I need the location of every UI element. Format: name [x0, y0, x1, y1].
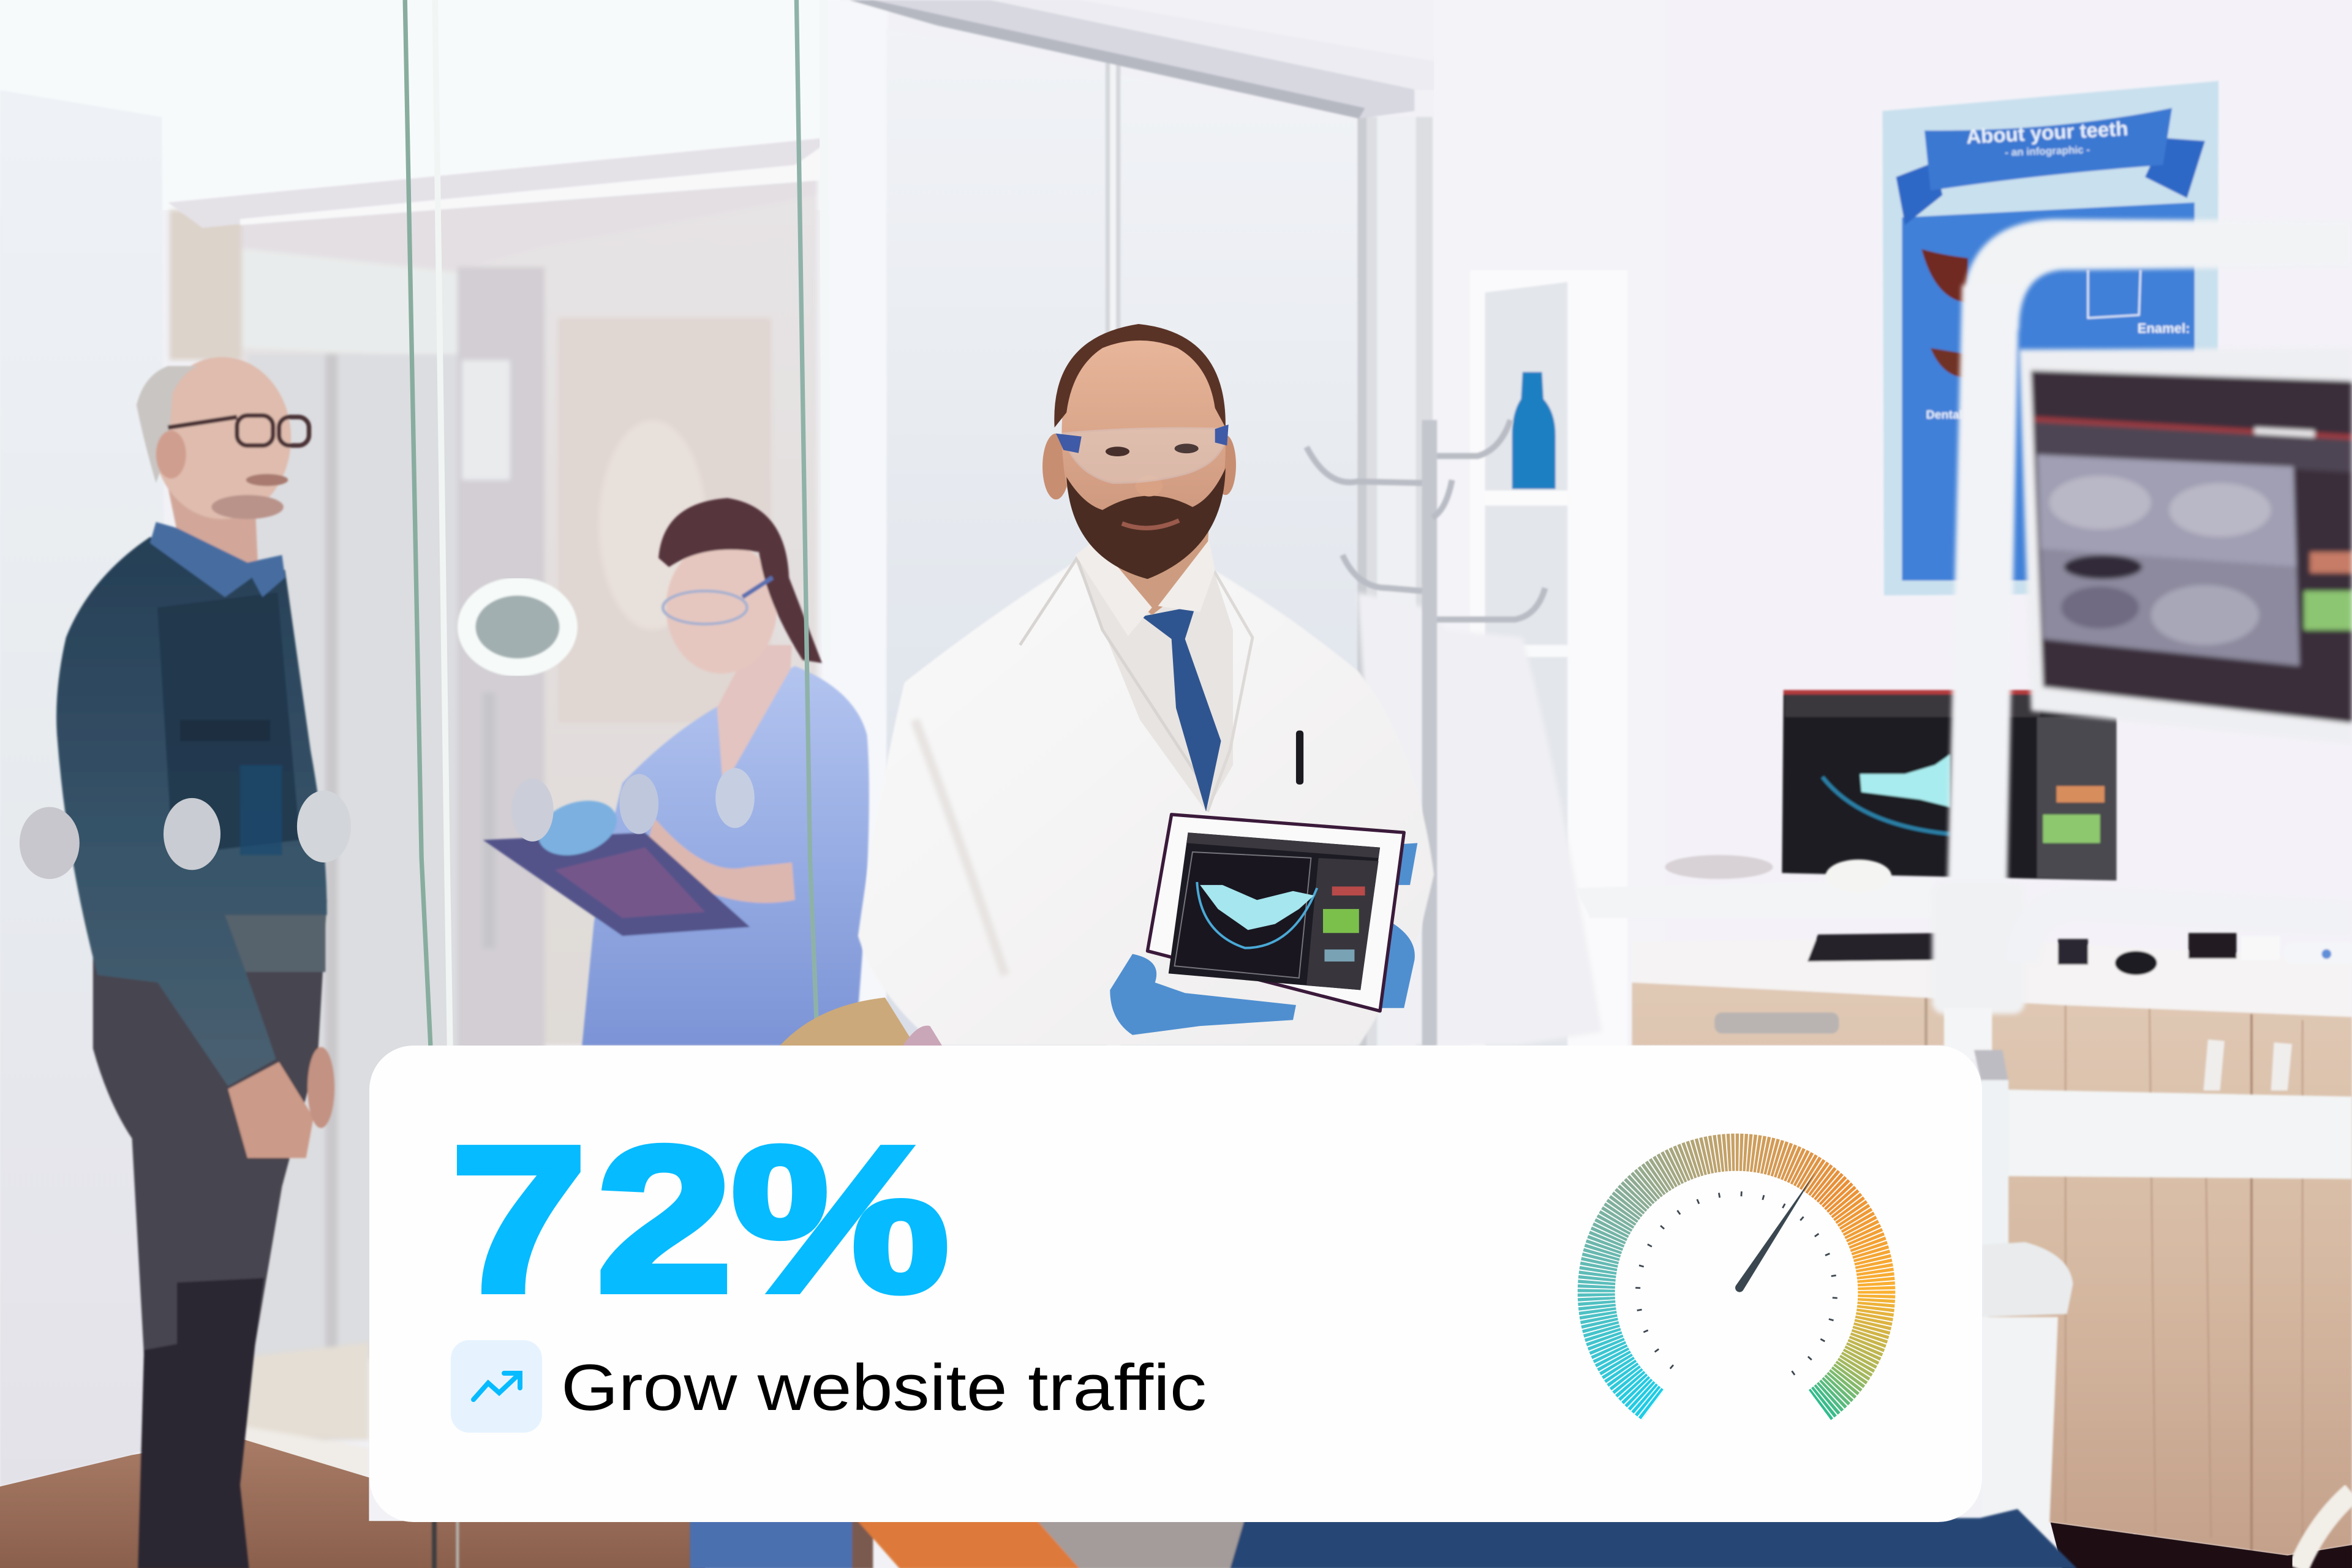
grey collar [1974, 1050, 2008, 1083]
shelf board [1485, 491, 1567, 505]
man hand [228, 1062, 314, 1158]
arrow head [504, 1373, 520, 1388]
eye right [1175, 443, 1199, 453]
safety glasses [1056, 424, 1229, 483]
nurse temple [742, 578, 772, 597]
ceiling lightbox [243, 249, 458, 357]
x-ray shade left [2061, 587, 2139, 628]
poster tooth image 1 [1921, 249, 1968, 303]
neck [1089, 525, 1209, 615]
cabinet drawer handle [1714, 1012, 1839, 1033]
clipboard tint [555, 848, 705, 918]
hanging white coat [1357, 592, 1602, 1046]
x-ray upper light right [2169, 483, 2271, 537]
back monitor [1782, 690, 2117, 881]
nurse glove [531, 791, 624, 865]
chair arm at lower right [2298, 1493, 2352, 1568]
lab coat body [858, 561, 1434, 1046]
horizontal pipe [1981, 1089, 2352, 1179]
nurse scrubs [582, 666, 869, 1046]
shelf niche [1485, 282, 1567, 1050]
door handle [483, 693, 495, 948]
monitor toolbar [1785, 695, 2040, 717]
mouse [2115, 951, 2157, 975]
dot 1 [20, 807, 80, 879]
tablet lower icons [1324, 949, 1354, 962]
cabinet white pull one [2204, 1039, 2225, 1090]
interior back room [203, 150, 818, 1440]
cabinet grain [2065, 1005, 2302, 1554]
cabinet line two [2251, 1014, 2252, 1551]
upper-left wall [0, 0, 840, 210]
glass door bottom [432, 1518, 437, 1568]
x-ray top [2037, 454, 2296, 567]
tablet [1147, 815, 1404, 1011]
wall section [822, 0, 888, 1050]
shelf unit [1470, 270, 1627, 1050]
poster subtitle: - an infographic - [2005, 143, 2090, 159]
glass edge two [435, 0, 450, 1046]
man at left [56, 357, 334, 1568]
gauge needle [1735, 1172, 1815, 1292]
glass edge one [405, 0, 431, 1046]
wooden floor [0, 1437, 705, 1568]
floor inside room [240, 1343, 369, 1440]
dentist hair [1054, 324, 1226, 428]
wall poster [1882, 81, 2218, 595]
shirt reflection dark [157, 592, 300, 855]
monitor orange icons [2310, 552, 2352, 573]
glasses left temple [1056, 434, 1082, 453]
counter top [1632, 938, 2352, 1017]
glasses lens [1062, 428, 1227, 483]
wood right of nurse [852, 1518, 873, 1568]
door frame right [1357, 117, 1433, 1047]
dentist beard [1066, 468, 1226, 579]
patient hair [780, 998, 915, 1046]
left lens [237, 415, 273, 445]
door frame light [1377, 117, 1416, 1047]
monitor bezel [2019, 348, 2352, 744]
monitor green grid [2304, 591, 2352, 630]
right lapel shade [1207, 570, 1253, 812]
frosted dots on glass [20, 768, 755, 879]
room behind glass [170, 150, 818, 1477]
dental chair orange [855, 1518, 1080, 1568]
headline 72%: 72% [451, 1104, 949, 1335]
shirt front [1076, 561, 1233, 812]
shirt blue blocks [240, 765, 282, 855]
top rail cap [990, 0, 1500, 90]
man trousers [93, 900, 327, 1568]
vertical pipe [1981, 1080, 2008, 1260]
black container [2188, 933, 2236, 959]
patient wrist strap [903, 1026, 942, 1046]
man shirt [56, 537, 327, 1086]
dark column [458, 267, 545, 1227]
tablet teeth arc [1197, 882, 1317, 948]
glasses right temple [1215, 424, 1229, 445]
poster tooth image 2 [1931, 348, 1968, 378]
panel divider [1106, 63, 1120, 963]
trend line [473, 1374, 519, 1400]
monitor toolbar strip [2034, 421, 2352, 472]
stat card [369, 1046, 1982, 1522]
patient jeans [1230, 1509, 2078, 1568]
man neck [168, 488, 258, 567]
dot 4 [511, 778, 554, 842]
man mouth shade [246, 474, 288, 486]
collar right [1158, 540, 1215, 612]
glass panel right [1120, 75, 1357, 1050]
dot 5 [619, 774, 658, 834]
clipboard [483, 832, 750, 936]
interior ceiling [240, 173, 818, 270]
poster enamel label: Enamel: [2138, 321, 2190, 336]
picture frame on wall [558, 318, 771, 723]
divider highlight [1110, 63, 1116, 963]
arm vertical [1947, 285, 2019, 900]
dentist head [1061, 324, 1226, 579]
tablet side panel [1306, 858, 1379, 990]
elevator doors [247, 354, 458, 1359]
rack arm upper right [1437, 420, 1510, 456]
cream device [2241, 936, 2280, 960]
man ear [156, 431, 186, 478]
nurse trousers [690, 1518, 855, 1568]
scanner blue dots [2322, 949, 2331, 959]
shelf board lower [1485, 645, 1567, 657]
waist reflection [210, 894, 325, 972]
pipe and stool base [1944, 1008, 2352, 1537]
cabinet line one [1925, 990, 1926, 1046]
left glove [1110, 954, 1296, 1035]
tablet green grid [1323, 909, 1359, 933]
x-ray dark shade [2064, 555, 2142, 579]
ribbon tail left [1896, 162, 1942, 225]
rack arm upper left [1306, 447, 1422, 483]
dentist ear left [1042, 434, 1069, 500]
right wall [1665, 0, 2352, 1050]
man second hand [307, 1047, 334, 1128]
top rail dark band [849, 0, 1365, 118]
dot 6 [715, 768, 755, 828]
dental arm [1932, 219, 2352, 1014]
cup stem [1981, 1317, 2058, 1537]
man collar [150, 522, 285, 597]
white scanner [2283, 942, 2352, 965]
arm lower curve [2022, 903, 2352, 963]
right glove behind tablet [1380, 843, 1417, 1008]
ribbon [1924, 108, 2172, 190]
nurse head [666, 541, 777, 674]
coat rack [1306, 420, 1545, 1046]
tablet body [1147, 815, 1404, 1011]
dot 3 [297, 791, 351, 862]
keyboard [1807, 933, 1944, 962]
top rail [849, 0, 1414, 118]
nurse glasses [663, 578, 772, 624]
rack pole [1427, 420, 1433, 1046]
dental chair grey [1035, 1518, 1275, 1568]
teeth arc [1823, 777, 1950, 834]
ring lamp [467, 587, 568, 668]
glass edge four [823, 0, 826, 660]
left white panel [0, 90, 168, 1487]
monitor screen [2031, 371, 2352, 723]
nurse forearm [645, 818, 795, 903]
lintel highlight [240, 144, 825, 225]
lamp ring [467, 587, 568, 668]
x-ray bottom [2040, 549, 2299, 666]
arm top horizontal [1962, 219, 2352, 330]
dentist nose [1136, 475, 1163, 497]
tablet toolbar [1186, 832, 1380, 858]
shelf body [1470, 270, 1627, 1050]
glass edge three [796, 0, 818, 1046]
man chin stubble [211, 495, 284, 519]
sliding door area [822, 0, 1500, 1050]
poster diagram [2088, 270, 2141, 318]
monitor body [1782, 690, 2117, 881]
man glasses [168, 415, 309, 445]
lintel above glass room [168, 138, 825, 228]
monitor white tab [2255, 428, 2315, 441]
eye left [1106, 447, 1129, 456]
door frame inner [1357, 117, 1366, 1047]
icon tile [451, 1340, 542, 1433]
tablet view frame [1175, 852, 1311, 978]
lamp disc [472, 591, 562, 663]
glass panel left [886, 29, 1107, 1050]
x-ray upper light [2049, 475, 2151, 529]
dentist ear right [1215, 435, 1236, 495]
shirt reflection blocks [180, 720, 270, 741]
rack arm lower right [1437, 588, 1545, 619]
glass door lines [405, 0, 826, 1046]
upper stem [1944, 1008, 1992, 1059]
man hair [137, 366, 198, 483]
monitor side panel [2037, 717, 2117, 881]
card contents [451, 1104, 1838, 1433]
coat sleeve shade [915, 720, 1005, 975]
collar left [1076, 540, 1152, 636]
ribbon tail right [2145, 138, 2205, 198]
nurse neck and neckline [717, 645, 792, 788]
dentist mouth [1122, 521, 1179, 528]
right wall section [1434, 0, 1665, 1050]
baseboard [235, 1425, 369, 1477]
rack hook [1433, 480, 1452, 518]
monitor red stripe [2034, 417, 2352, 440]
bottom strip below card [432, 1509, 2078, 1568]
front monitor [2019, 348, 2352, 744]
cup base [1981, 1242, 2073, 1317]
tablet teeth [1200, 885, 1314, 930]
poster blue field [1902, 203, 2195, 581]
counter and cabinets [1575, 855, 2352, 1556]
nurse [483, 498, 869, 1046]
glass door bottom two [456, 1518, 459, 1568]
dot 2 [164, 798, 221, 870]
stone strip [170, 210, 241, 360]
label: Grow website traffic [561, 1351, 1207, 1424]
poster backing [1882, 81, 2218, 595]
green grid [2043, 815, 2100, 843]
nurse hair [658, 498, 822, 663]
bottle [1512, 372, 1556, 489]
nurse lens [663, 591, 747, 624]
picture sketch [598, 420, 706, 630]
tablet red icons [1332, 886, 1365, 895]
door seam [325, 354, 337, 1359]
teeth [1860, 755, 1950, 807]
left lapel shade [1020, 558, 1200, 780]
cabinet fronts [1632, 982, 2352, 1556]
tile background [451, 1340, 542, 1433]
tray instruments [1665, 855, 1773, 879]
shelf tray [1575, 879, 1935, 918]
pen [1296, 731, 1303, 785]
under-cabinet shadow [2051, 1523, 2352, 1568]
tie [1142, 606, 1221, 812]
trend arrow icon [473, 1373, 520, 1400]
rack arm lower left [1343, 555, 1422, 591]
orange icons [2057, 786, 2105, 802]
man head [153, 357, 291, 519]
poster dental label: Dental [1926, 408, 1962, 421]
cabinet white pull two [2271, 1042, 2292, 1090]
gauge dial bars [1576, 1132, 1897, 1453]
dentist [780, 324, 1434, 1046]
lower leg dark [138, 1278, 264, 1568]
small black box [2058, 939, 2088, 965]
cotton rolls [1825, 859, 1891, 892]
arm joint [1932, 882, 2025, 1014]
gauge ticks [1635, 1191, 1838, 1375]
temple [168, 417, 237, 428]
door light reflection [462, 360, 510, 480]
tablet screen [1169, 832, 1380, 990]
right lens [279, 417, 309, 445]
x-ray light [2151, 585, 2259, 645]
poster title: About your teeth [1966, 118, 2128, 149]
monitor red stripe [1784, 690, 2038, 695]
